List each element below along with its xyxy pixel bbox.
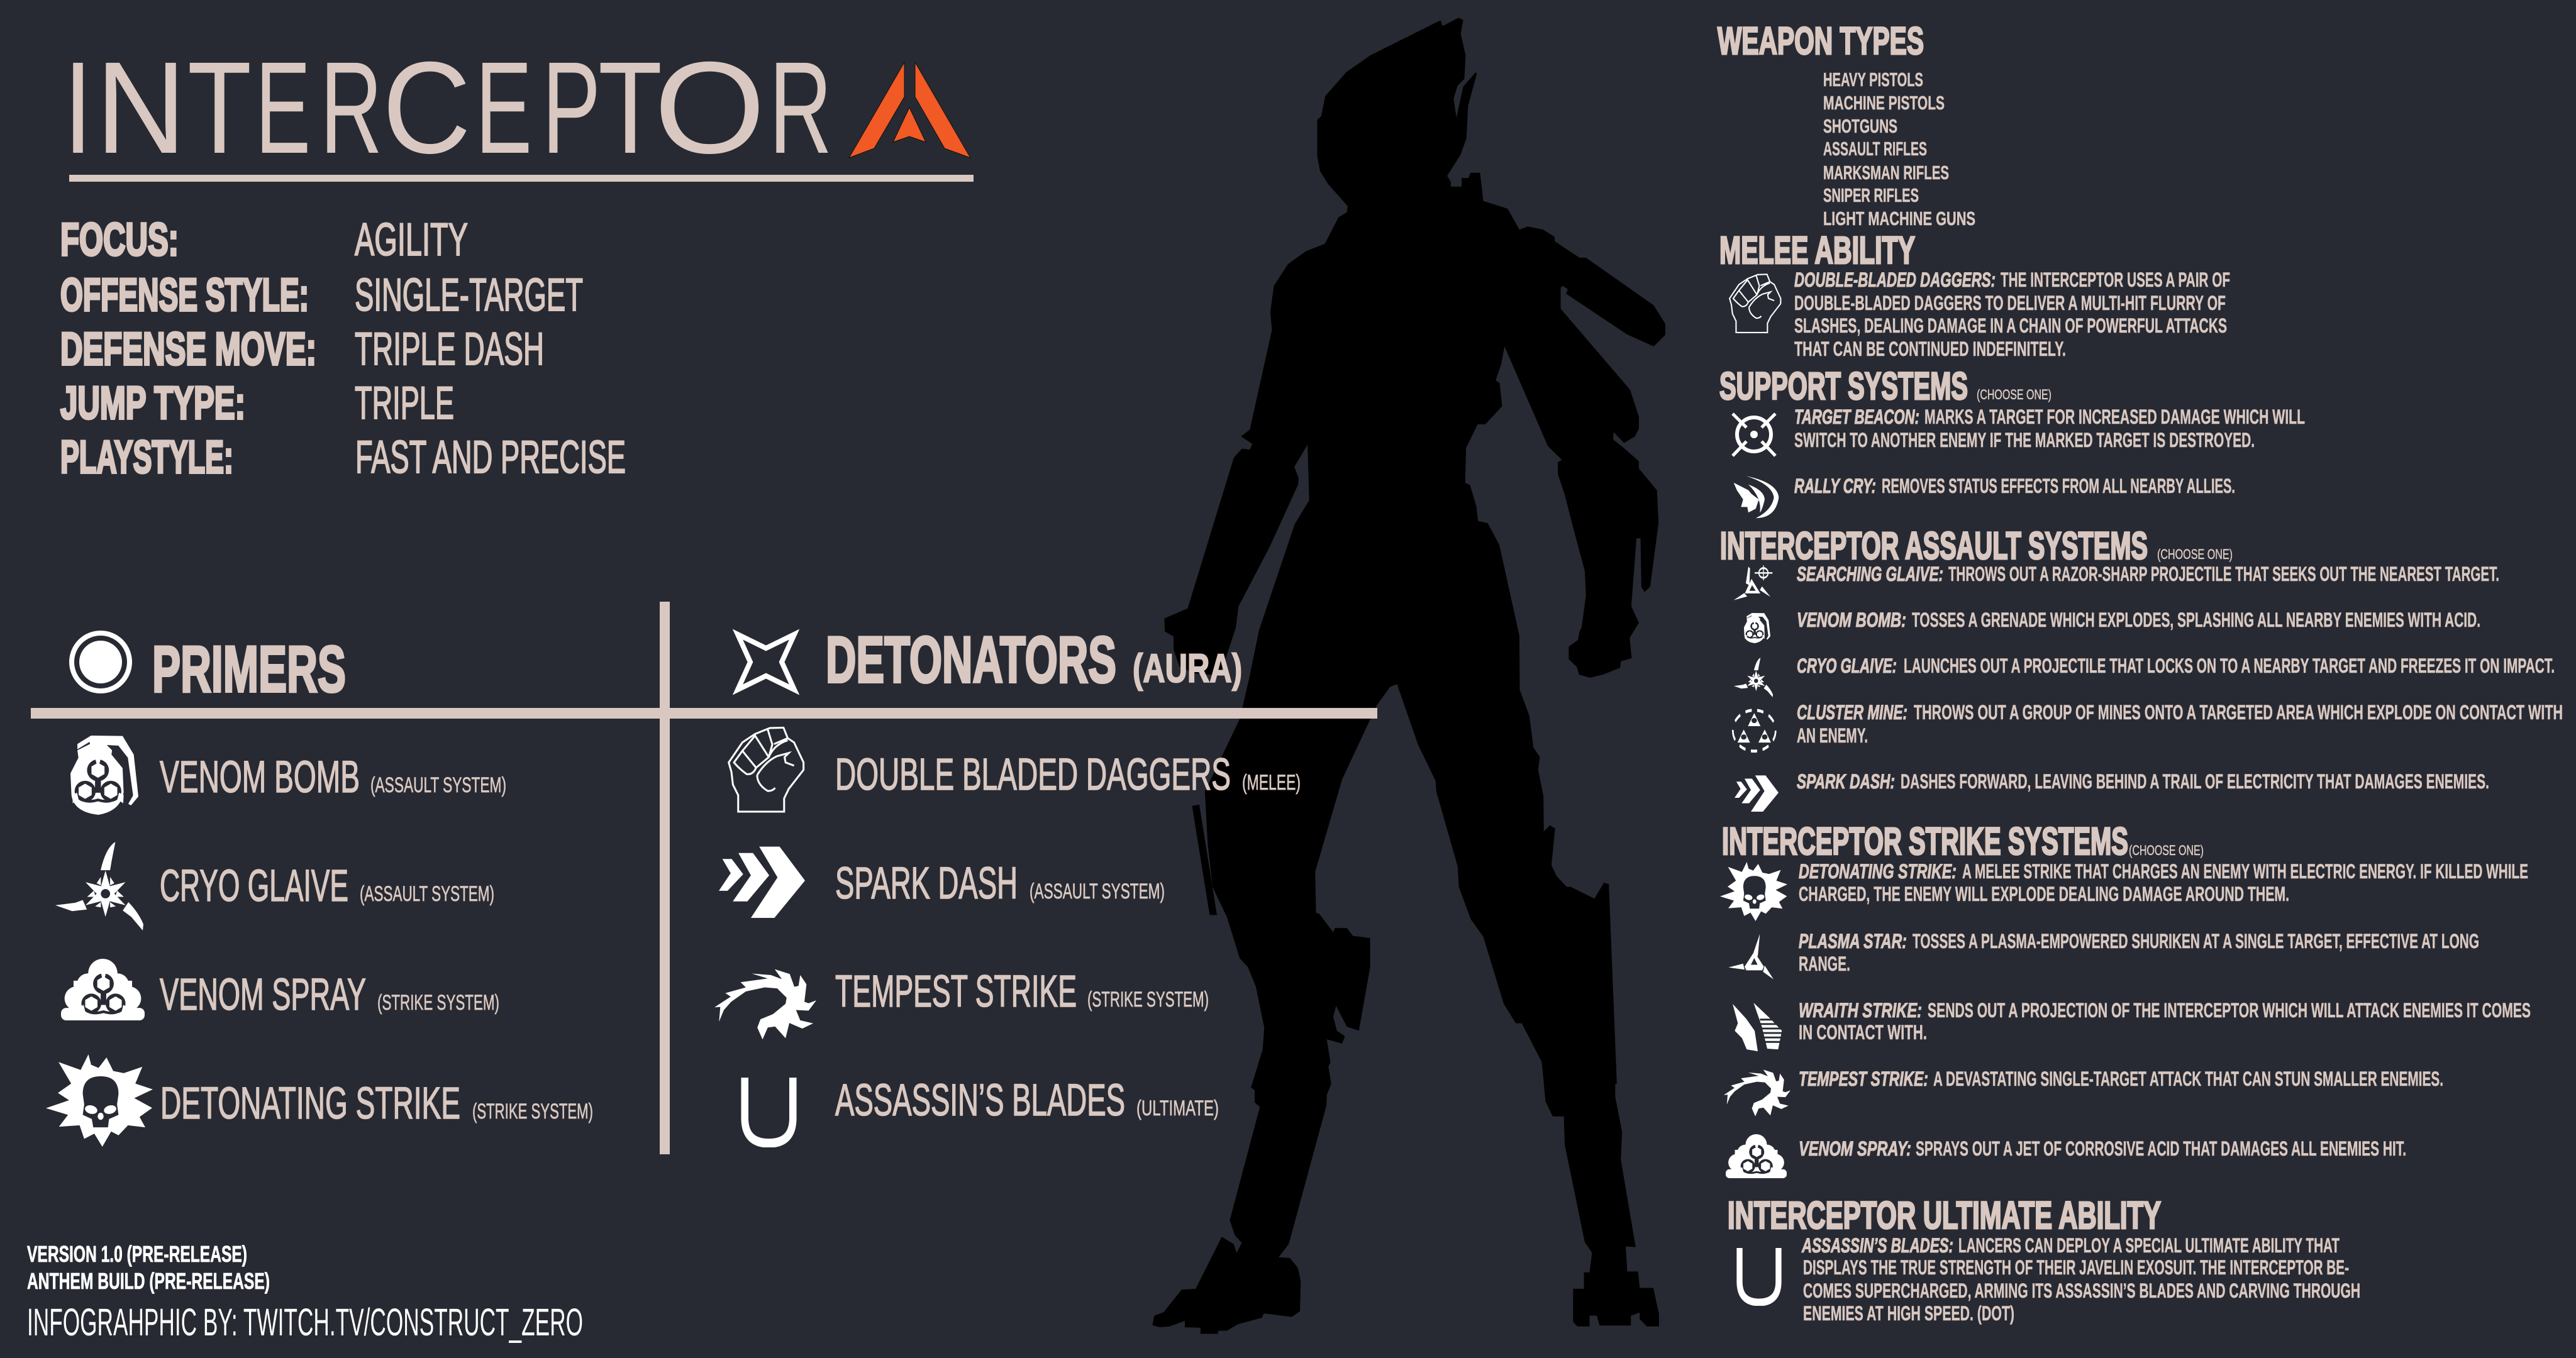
primer: detonating strike: DETONATING STRIKE — [160, 1079, 460, 1129]
section: strike systems: INTERCEPTOR STRIKE SYSTEMS — [1722, 820, 2128, 863]
section: melee ability: THE INTERCEPTOR USES A PAIR OF — [2001, 268, 2230, 291]
title: E — [475, 35, 532, 181]
icon: searching glaive — [1734, 565, 1772, 600]
detonator: assassin's blades: ASSASSIN’S BLADES — [835, 1076, 1125, 1125]
icon: rally cry — [1734, 476, 1779, 518]
section: weapon types — [1718, 19, 1975, 229]
section: strike systems: IN CONTACT WITH. — [1799, 1021, 1927, 1044]
section: weapon types: SNIPER RIFLES — [1823, 184, 1919, 206]
footer credits — [27, 1241, 583, 1344]
section: assault systems: CLUSTER MINE: — [1797, 701, 1907, 724]
detonator: spark dash — [719, 847, 1165, 918]
section: melee ability: THAT CAN BE CONTINUED INDEFINITELY. — [1794, 338, 2066, 360]
section: ultimate ability: INTERCEPTOR ULTIMATE ABILITY — [1728, 1194, 2161, 1237]
stats block: DEFENSE MOVE: — [60, 324, 316, 375]
section: support systems — [1719, 365, 2305, 518]
primer: venom spray — [61, 959, 499, 1020]
primer: venom spray: VENOM SPRAY — [160, 970, 366, 1020]
detonator: double bladed daggers: DOUBLE BLADED DAGGERS — [835, 750, 1231, 800]
section: strike systems: WRAITH STRIKE: — [1799, 999, 1922, 1022]
section: support systems: REMOVES STATUS EFFECTS FROM ALL NEARBY ALLIES. — [1882, 475, 2235, 497]
icon: venom spray small — [1726, 1134, 1787, 1178]
icon: detonating strike small — [1720, 862, 1787, 921]
section: ultimate ability — [1728, 1194, 2360, 1325]
icon: primer — [72, 633, 130, 691]
icon: wraith strike — [1733, 1003, 1782, 1051]
stats block: OFFENSE STYLE: — [60, 270, 309, 321]
primer: detonating strike — [46, 1054, 593, 1147]
section: weapon types: HEAVY PISTOLS — [1823, 69, 1923, 91]
footer credits: INFOGRAHPHIC BY: TWITCH.TV/CONSTRUCT_ZERO — [27, 1301, 583, 1344]
icon: cluster mine — [1733, 710, 1775, 751]
heading: detonators: DETONATORS — [826, 624, 1116, 697]
stats block: TRIPLE — [355, 378, 454, 429]
title: I — [64, 35, 92, 181]
icon: interceptor logo — [849, 62, 970, 158]
heading: detonators: (AURA) — [1133, 646, 1242, 691]
section: melee ability — [1719, 229, 2230, 360]
detonator: double bladed daggers: (MELEE) — [1242, 771, 1301, 795]
footer credits: VERSION 1.0 (PRE-RELEASE) — [27, 1241, 247, 1267]
detonator: tempest strike: TEMPEST STRIKE — [835, 967, 1077, 1017]
section: melee ability: DOUBLE-BLADED DAGGERS: — [1794, 268, 1996, 291]
detonator: spark dash: SPARK DASH — [835, 859, 1018, 908]
section: support systems: RALLY CRY: — [1794, 475, 1876, 497]
section: ultimate ability: ENEMIES AT HIGH SPEED. (DOT) — [1803, 1302, 2014, 1325]
primer: cryo glaive: CRYO GLAIVE — [160, 861, 348, 911]
title: T — [598, 35, 662, 181]
section: strike systems: TEMPEST STRIKE: — [1799, 1068, 1928, 1090]
stats block: JUMP TYPE: — [60, 378, 245, 429]
primer: cryo glaive: (ASSAULT SYSTEM) — [360, 882, 494, 906]
section: strike systems: VENOM SPRAY: — [1799, 1137, 1911, 1160]
detonator: assassin's blades: (ULTIMATE) — [1136, 1096, 1219, 1120]
section: weapon types: MACHINE PISTOLS — [1823, 92, 1945, 114]
title: C — [382, 35, 471, 181]
icon: cryo glaive small — [1734, 658, 1773, 697]
section: support systems: (CHOOSE ONE) — [1977, 387, 2051, 402]
detonator: tempest strike — [714, 967, 1209, 1039]
icon: target beacon — [1733, 414, 1775, 456]
primer: cryo glaive — [55, 842, 494, 930]
section: assault systems: SPARK DASH: — [1797, 770, 1895, 793]
section: assault systems: INTERCEPTOR ASSAULT SYSTEMS — [1720, 524, 2148, 567]
section: weapon types: MARKSMAN RIFLES — [1823, 162, 1949, 184]
section: ultimate ability: ASSASSIN’S BLADES: — [1801, 1234, 1953, 1257]
section: strike systems: PLASMA STAR: — [1799, 930, 1907, 952]
section: support systems: TARGET BEACON: — [1794, 406, 1919, 428]
title: O — [654, 35, 765, 181]
stats block: FOCUS: — [60, 214, 179, 265]
section: melee ability: SLASHES, DEALING DAMAGE IN A CHAIN OF POWERFUL ATTACKS — [1794, 314, 2227, 337]
section: weapon types: SHOTGUNS — [1823, 115, 1897, 137]
table dividers — [31, 602, 1377, 1154]
stats block: TRIPLE DASH — [355, 324, 544, 375]
title: R — [769, 35, 832, 181]
section: weapon types: LIGHT MACHINE GUNS — [1823, 207, 1975, 229]
detonator: assassin's blades — [745, 1076, 1219, 1143]
title: P — [542, 35, 601, 181]
section: assault systems: SEARCHING GLAIVE: — [1797, 563, 1943, 585]
stats block: FAST AND PRECISE — [355, 432, 626, 483]
stats block: SINGLE-TARGET — [355, 270, 583, 321]
detonator: spark dash: (ASSAULT SYSTEM) — [1030, 880, 1165, 903]
stats block — [60, 214, 626, 483]
section: strike systems: (CHOOSE ONE) — [2129, 842, 2204, 858]
stats block: AGILITY — [355, 214, 468, 265]
section: assault systems — [1720, 524, 2563, 812]
section: support systems: SUPPORT SYSTEMS — [1719, 365, 1968, 407]
section: ultimate ability: LANCERS CAN DEPLOY A SPECIAL ULTIMATE ABILITY THAT — [1958, 1234, 2340, 1257]
detonator: tempest strike: (STRIKE SYSTEM) — [1087, 988, 1209, 1012]
section: support systems: SWITCH TO ANOTHER ENEMY IF THE MARKED TARGET IS DESTROYED. — [1794, 429, 2255, 451]
section: strike systems: DETONATING STRIKE: — [1799, 860, 1957, 883]
heading: primers: PRIMERS — [152, 633, 346, 706]
section: assault systems: CRYO GLAIVE: — [1797, 654, 1897, 677]
primer: detonating strike: (STRIKE SYSTEM) — [472, 1100, 593, 1123]
section: assault systems: VENOM BOMB: — [1797, 609, 1906, 631]
detonator: double bladed daggers — [729, 727, 1301, 812]
section: melee ability: MELEE ABILITY — [1719, 229, 1915, 272]
section: support systems: MARKS A TARGET FOR INCREASED DAMAGE WHICH WILL — [1924, 406, 2305, 428]
section: assault systems: (CHOOSE ONE) — [2157, 546, 2233, 562]
section: weapon types: WEAPON TYPES — [1718, 19, 1924, 62]
icon: plasma star — [1728, 934, 1774, 980]
title: E — [255, 35, 311, 181]
section: melee ability: DOUBLE-BLADED DAGGERS TO DELIVER A MULTI-HIT FLURRY OF — [1794, 292, 2226, 314]
icon: venom bomb small — [1744, 613, 1770, 643]
icon: detonator — [738, 634, 794, 690]
primer: venom bomb: (ASSAULT SYSTEM) — [370, 773, 506, 797]
section: assault systems: AN ENEMY. — [1797, 724, 1868, 747]
icon: tempest strike small — [1724, 1069, 1790, 1117]
character silhouette — [1152, 18, 1665, 1334]
title: R — [320, 35, 382, 181]
icon: spark dash small — [1735, 775, 1779, 812]
section: strike systems: CHARGED, THE ENEMY WILL EXPLODE DEALING DAMAGE AROUND THEM. — [1799, 883, 2289, 905]
section: weapon types: ASSAULT RIFLES — [1823, 138, 1927, 160]
title underline — [69, 175, 974, 182]
primer: venom bomb — [70, 736, 506, 815]
primer: venom spray: (STRIKE SYSTEM) — [377, 991, 499, 1015]
section: strike systems: RANGE. — [1799, 952, 1850, 975]
footer credits: ANTHEM BUILD (PRE-RELEASE) — [27, 1268, 270, 1294]
title: T — [187, 35, 252, 181]
stats block: PLAYSTYLE: — [60, 432, 233, 483]
title: N — [96, 35, 186, 181]
section: strike systems — [1720, 820, 2531, 1178]
primer: venom bomb: VENOM BOMB — [160, 753, 360, 802]
